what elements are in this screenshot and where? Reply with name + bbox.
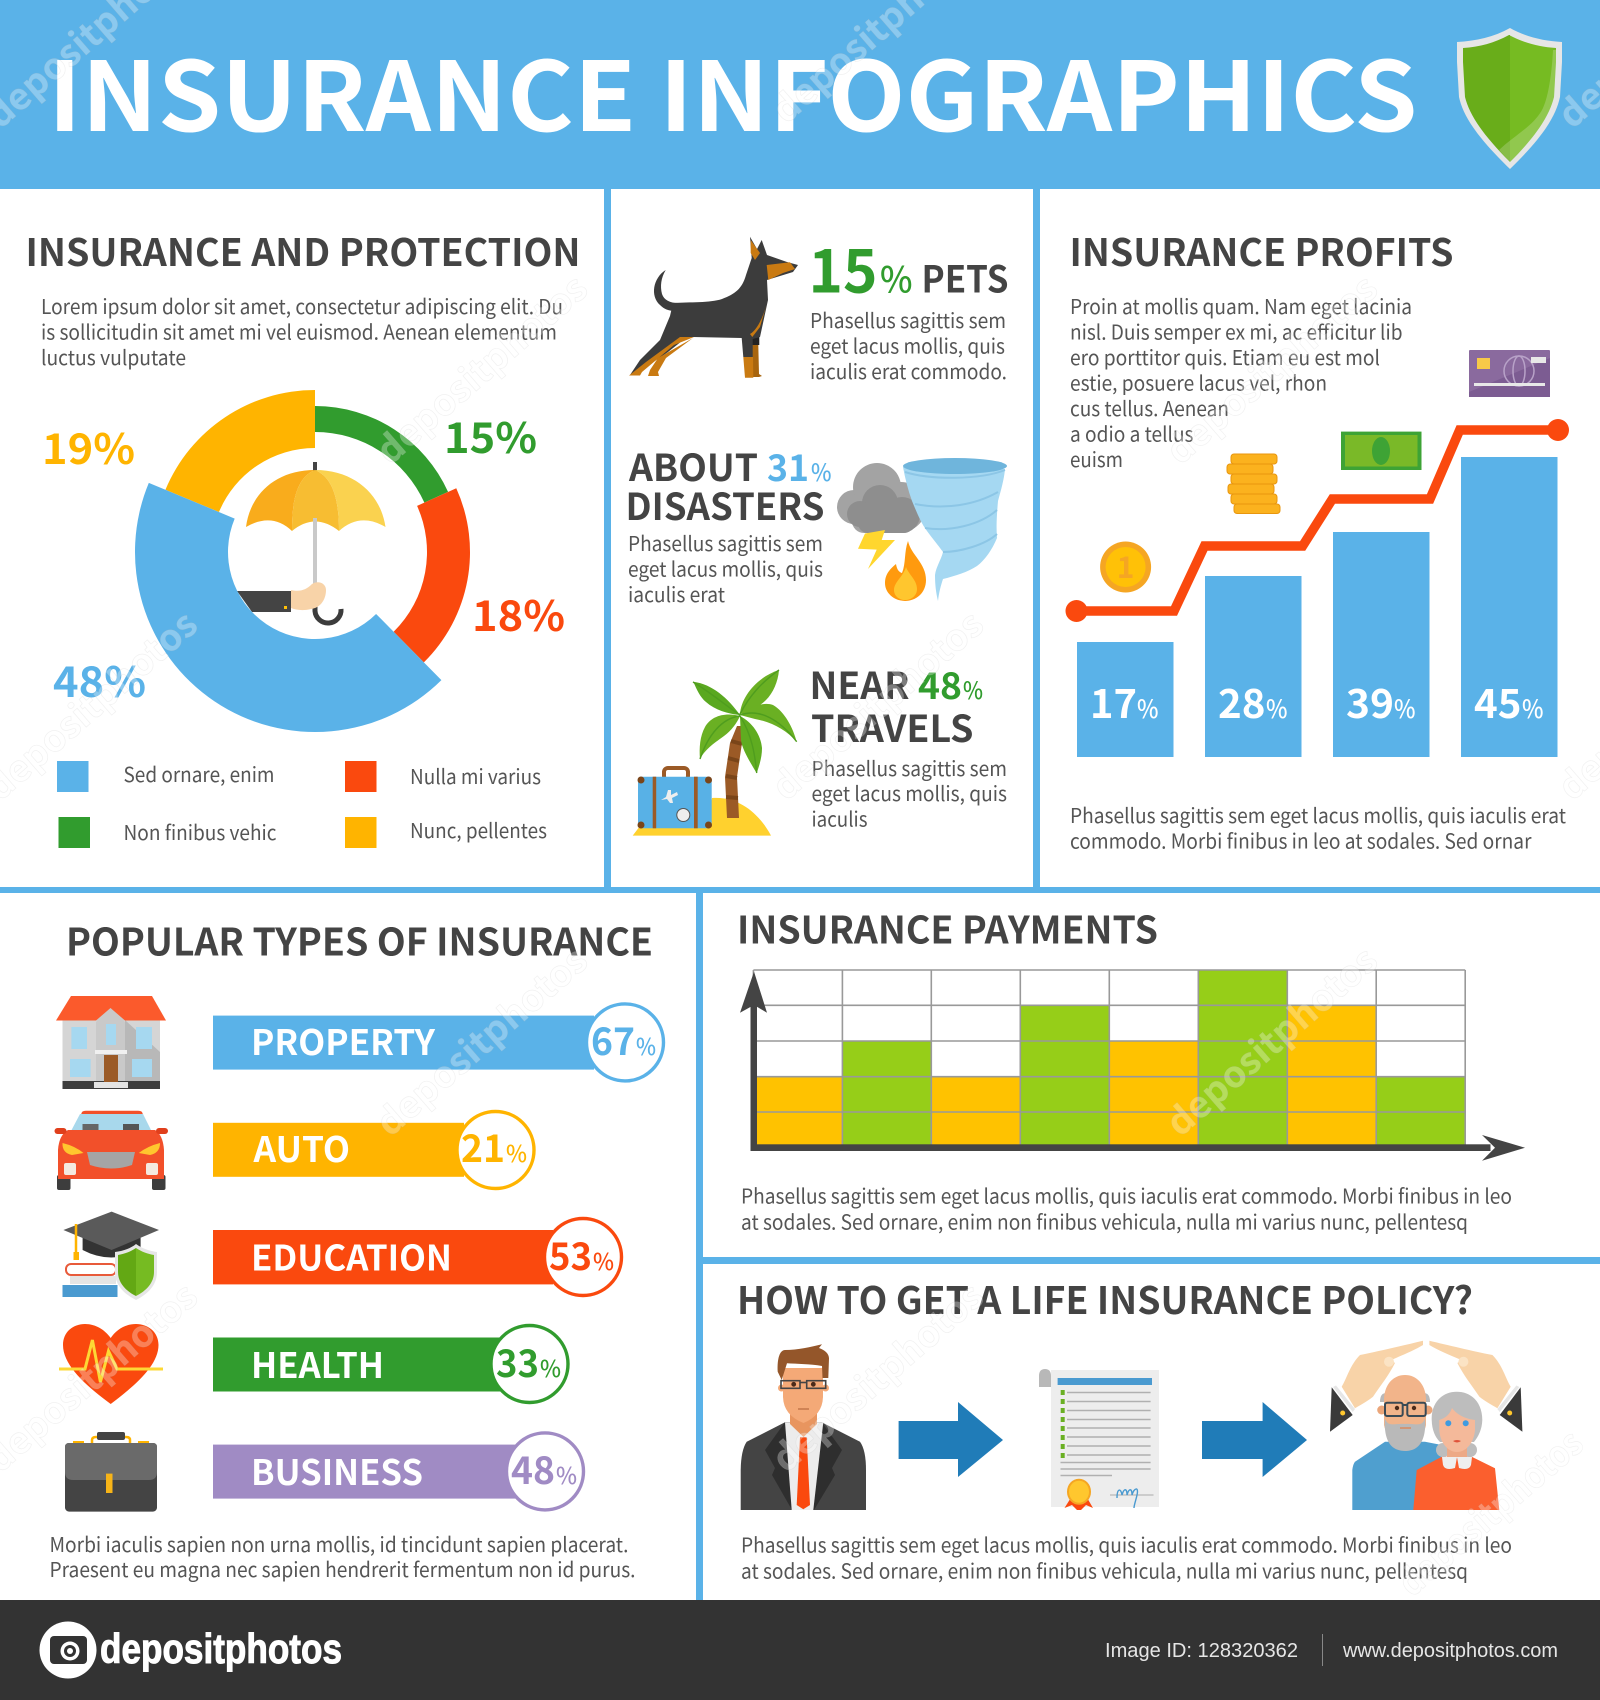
stat: 15% pets: %: [880, 252, 912, 304]
intro text: ero porttitor quis. Etiam eu est mol: [1070, 341, 1380, 371]
text: depositphotos: [759, 1269, 993, 1482]
stat: about 31% disasters: [626, 438, 832, 531]
title: INSURANCE INFOGRAPHICS: [48, 20, 1417, 159]
icon: car: [54, 1111, 168, 1190]
badge: 21%: %: [506, 1135, 527, 1169]
stat: 15% pets: [808, 224, 1008, 310]
panel: insurance and protection: [26, 222, 580, 848]
panel: insurance payments: [737, 900, 1525, 1236]
bar chart: %: [1137, 690, 1158, 726]
bar chart: %: [1394, 690, 1416, 726]
icon: coin: [1100, 542, 1151, 592]
donut chart: [42, 390, 565, 732]
text: Phasellus sagittis sem eget lacus mollis, quis iaculis erat commodo. Morbi finibus in leo: [741, 1529, 1512, 1559]
stat: near 48% travels: 48: [918, 656, 962, 710]
text: eget lacus mollis, quis: [812, 777, 1007, 807]
block: travels: [633, 656, 1007, 836]
woman: [1413, 1392, 1499, 1510]
stat: about 31% disasters: %: [811, 453, 832, 488]
text: depositphotos: [1153, 933, 1387, 1146]
line chart: [1066, 419, 1569, 622]
badge: 67%: [586, 1004, 664, 1081]
bar: health: [213, 1338, 503, 1392]
stat: near 48% travels: TRAVELS: [811, 699, 974, 753]
badge: 33%: [491, 1326, 568, 1402]
icon: storm: [837, 458, 1007, 601]
panel: insurance profits: [1066, 222, 1569, 854]
intro text: luctus vulputate: [41, 341, 186, 371]
label: HEALTH: [251, 1338, 384, 1389]
text: Morbi iaculis sapien non urna mollis, id tincidunt sapien placerat.: [50, 1528, 628, 1558]
image id: Image ID: 128320362: [1105, 1640, 1298, 1662]
text: [741, 1529, 1512, 1584]
icon: graduation cap, books and shield: [62, 1212, 159, 1300]
block: pets: [629, 224, 1008, 385]
bar: property: [213, 1016, 594, 1070]
header banner: [0, 0, 1600, 189]
panel: life insurance policy: [737, 1270, 1522, 1584]
icon: coin stack: [1227, 454, 1280, 514]
intro text: a odio a tellus: [1070, 418, 1194, 448]
badge: 67%: 67: [591, 1011, 635, 1066]
stat: 15% pets: PETS: [922, 250, 1008, 304]
stat: about 31% disasters: 31: [767, 438, 809, 492]
heading: INSURANCE AND PROTECTION: [26, 222, 580, 277]
stat: near 48% travels: %: [963, 671, 983, 706]
stacked grid chart: [740, 970, 1525, 1161]
panel: popular types of insurance: [50, 912, 664, 1583]
arrow: [1202, 1402, 1307, 1477]
stat: about 31% disasters: DISASTERS: [626, 477, 824, 531]
icon: man in suit: [741, 1344, 866, 1510]
icon: protected elderly couple: [1330, 1341, 1522, 1510]
text: Phasellus sagittis sem: [628, 527, 823, 557]
text: commodo. Morbi finibus in leo at sodales. Sed ornar: [1070, 824, 1532, 854]
badge: 21%: [457, 1112, 534, 1188]
intro text: estie, posuere lacus vel, rhon: [1070, 366, 1327, 396]
text: eget lacus mollis, quis: [810, 330, 1005, 360]
intro text: cus tellus. Aenean: [1070, 392, 1229, 422]
legend: Nulla mi varius: [410, 760, 541, 790]
badge: 48%: %: [556, 1457, 577, 1491]
text: Phasellus sagittis sem eget lacus mollis, quis iaculis erat commodo. Morbi finibus in leo: [741, 1180, 1512, 1210]
label: EDUCATION: [251, 1231, 452, 1282]
donut chart: 48%: [53, 649, 146, 710]
icon: coin: 1: [1117, 543, 1134, 587]
text: [810, 304, 1007, 385]
heading: INSURANCE PAYMENTS: [737, 900, 1158, 955]
text: Praesent eu magna nec sapien hendrerit fermentum non id purus.: [50, 1553, 636, 1583]
text: [741, 1180, 1512, 1236]
intro text: [1070, 290, 1412, 473]
badge: 33%: %: [540, 1350, 561, 1384]
stat: near 48% travels: [810, 656, 983, 753]
heading: HOW TO GET A LIFE INSURANCE POLICY?: [737, 1270, 1473, 1325]
icon: dog: [629, 237, 798, 378]
panel: statistics: [626, 224, 1008, 836]
label: PROPERTY: [251, 1015, 436, 1066]
text: at sodales. Sed ornare, enim non finibus vehicula, nulla mi varius nunc, pellentesq: [741, 1206, 1468, 1236]
text: eget lacus mollis, quis: [628, 552, 823, 582]
text: [50, 1528, 636, 1583]
legend: Non finibus vehic: [124, 816, 276, 846]
text: Phasellus sagittis sem: [812, 752, 1007, 782]
icon: policy document: [1039, 1369, 1159, 1510]
intro text: is sollicitudin sit amet mi vel euismod. Aenean elementum: [41, 316, 557, 346]
axis arrows: [740, 972, 1525, 1161]
text: depositphotos: [363, 933, 597, 1146]
badge: 67%: %: [636, 1028, 656, 1062]
text: depositphotos: [1153, 261, 1387, 474]
footer bar: [0, 1600, 1600, 1700]
badge: 48%: [506, 1433, 584, 1510]
website: www.depositphotos.com: [1342, 1640, 1558, 1662]
intro text: euism: [1070, 443, 1123, 473]
bar chart: %: [1522, 690, 1544, 726]
block: disasters: [626, 438, 1007, 608]
text: depositphotos: [759, 597, 993, 810]
text: at sodales. Sed ornare, enim non finibus vehicula, nulla mi varius nunc, pellentesq: [741, 1554, 1468, 1584]
badge: 21%: 21: [461, 1118, 505, 1173]
badge: 48%: 48: [511, 1440, 555, 1495]
icon: credit card: [1469, 350, 1550, 397]
text: depositphotos: [363, 261, 597, 474]
heading: POPULAR TYPES OF INSURANCE: [66, 912, 653, 966]
stat: about 31% disasters: ABOUT: [628, 438, 758, 492]
badge: 53%: 53: [549, 1226, 592, 1281]
stat: 15% pets: 15: [808, 224, 878, 310]
icon: briefcase: [65, 1432, 157, 1512]
intro text: Proin at mollis quam. Nam eget lacinia: [1070, 290, 1412, 320]
intro text: Lorem ipsum dolor sit amet, consectetur adipiscing elit. Du: [41, 290, 563, 320]
row: business: [65, 1432, 584, 1512]
hands: [1330, 1341, 1522, 1432]
row: auto: [54, 1111, 534, 1190]
logo: depositphotos: [100, 1625, 342, 1672]
bar chart: 45: [1474, 672, 1522, 730]
legend: Nunc, pellentes: [410, 814, 547, 844]
arrow: [899, 1402, 1003, 1477]
intro text: [41, 290, 563, 371]
label: AUTO: [252, 1122, 350, 1173]
row: property: [56, 996, 664, 1089]
bar chart: %: [1266, 690, 1288, 726]
row: health: [59, 1324, 568, 1404]
text: Phasellus sagittis sem: [810, 304, 1006, 334]
text: [812, 752, 1007, 832]
bar chart: 39: [1346, 672, 1394, 730]
donut chart: 19%: [42, 416, 135, 477]
stat: near 48% travels: NEAR: [810, 656, 910, 710]
donut chart: 15%: [444, 405, 537, 466]
text: iaculis erat: [628, 578, 725, 608]
icon: hand with umbrella: [237, 462, 386, 623]
logo: [40, 1622, 342, 1678]
text: Phasellus sagittis sem eget lacus mollis, quis iaculis erat: [1070, 799, 1566, 829]
icon: house: [56, 996, 166, 1089]
bar: auto: [213, 1123, 464, 1177]
legend: [57, 758, 547, 848]
intro text: nisl. Duis semper ex mi, ac efficitur lib: [1070, 316, 1402, 346]
dividers: [604, 189, 611, 889]
label: BUSINESS: [251, 1445, 423, 1496]
bar chart: 17: [1090, 672, 1137, 730]
text: iaculis: [812, 802, 868, 832]
row: education: [62, 1212, 622, 1300]
text: iaculis erat commodo.: [810, 355, 1007, 385]
bar chart: [1077, 457, 1558, 757]
bar: business: [213, 1445, 523, 1499]
man: [1352, 1375, 1442, 1510]
text: [628, 527, 823, 608]
badge: 53%: %: [593, 1243, 614, 1277]
icon: green shield: [1457, 28, 1562, 169]
icon: heart with pulse: [59, 1324, 163, 1404]
icon: banknote: [1341, 432, 1422, 470]
heading: INSURANCE PROFITS: [1070, 222, 1454, 277]
legend: Sed ornare, enim: [124, 758, 274, 788]
badge: 33%: 33: [496, 1333, 539, 1388]
badge: 53%: [544, 1218, 622, 1296]
donut chart: 18%: [472, 583, 565, 644]
bar chart: 28: [1218, 672, 1266, 730]
icon: palm island and suitcase: [633, 670, 797, 836]
text: [1070, 799, 1566, 854]
bar: education: [213, 1230, 553, 1284]
